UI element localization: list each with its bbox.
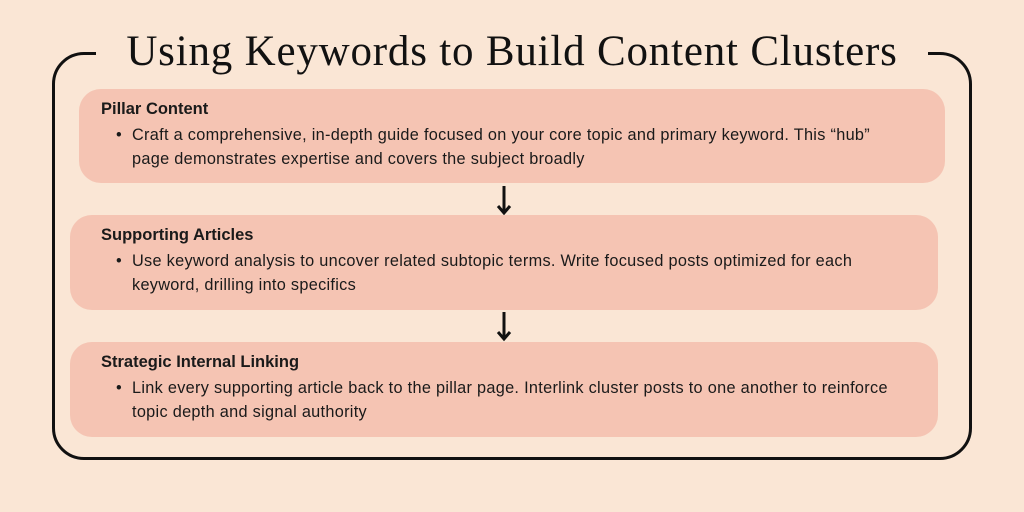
panel: strategic internal linking bbox=[70, 342, 938, 437]
panel: pillar content bbox=[79, 89, 945, 183]
heading: pillar content: Pillar Content bbox=[101, 100, 208, 118]
text: pillar content: page demonstrates expertise and covers the subject broadly bbox=[132, 150, 585, 168]
text: supporting articles: Use keyword analysis to uncover related subtopic terms. Write focused posts optimized for each bbox=[132, 252, 852, 270]
heading: strategic internal linking: Strategic Internal Linking bbox=[101, 353, 299, 371]
arrow 2 bbox=[496, 312, 512, 342]
title: Using Keywords to Build Content Clusters bbox=[126, 28, 898, 75]
text: strategic internal linking: Link every supporting article back to the pillar page. Interlink cluster posts to one another to reinforce bbox=[132, 379, 888, 397]
arrow 1 bbox=[496, 186, 512, 215]
text: supporting articles bbox=[132, 249, 932, 297]
text: pillar content bbox=[132, 123, 932, 171]
text: pillar content: Craft a comprehensive, in-depth guide focused on your core topic and primary keyword. This “hub” bbox=[132, 126, 870, 144]
text: strategic internal linking: topic depth and signal authority bbox=[132, 403, 367, 421]
frame bbox=[52, 52, 972, 460]
heading: supporting articles: Supporting Articles bbox=[101, 226, 253, 244]
text: strategic internal linking bbox=[132, 376, 932, 424]
text: supporting articles: keyword, drilling into specifics bbox=[132, 276, 356, 294]
panel: supporting articles bbox=[70, 215, 938, 310]
